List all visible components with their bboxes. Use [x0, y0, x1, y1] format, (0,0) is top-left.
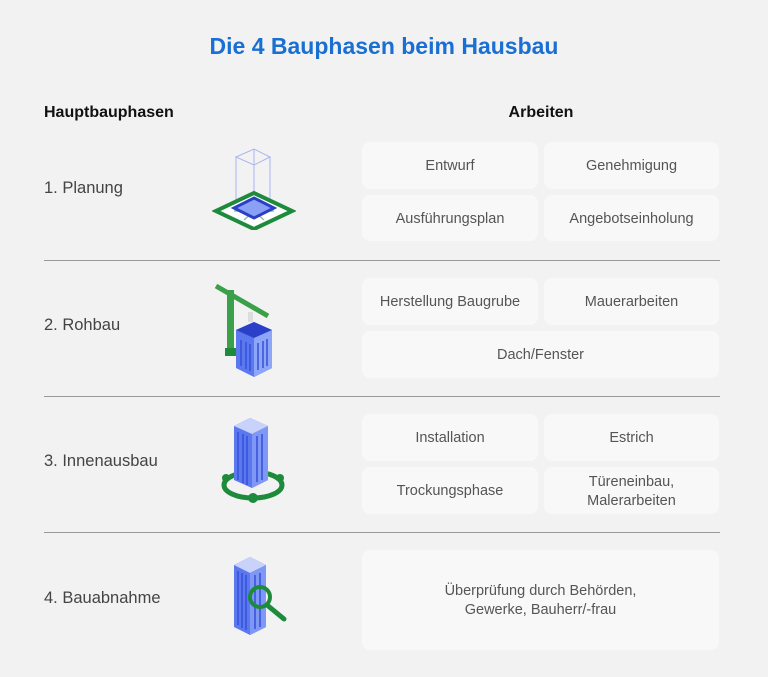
- icon: planning: [212, 148, 296, 230]
- phase 3 label: 3. Innenausbau: [44, 452, 158, 470]
- text: Trockungsphase: [397, 483, 503, 499]
- cards row 3: [362, 414, 538, 461]
- header: Hauptbauphasen: Hauptbauphasen: [44, 104, 174, 121]
- phase 2 label: 2. Rohbau: [44, 316, 120, 334]
- icon: crane building: [214, 284, 272, 377]
- text: Ausführungsplan: [396, 210, 504, 226]
- card row 4: Überprüfung durch Behörden,: [445, 583, 636, 599]
- text: Angebotseinholung: [569, 210, 694, 226]
- title: Die 4 Bauphasen beim Hausbau: [210, 33, 558, 59]
- phase 4 label: 4. Bauabnahme: [44, 589, 161, 607]
- cards row 2: Herstellung Baugrube: [380, 294, 520, 310]
- text: Mauerarbeiten: [585, 294, 678, 310]
- cards row 1: [362, 142, 538, 189]
- cards row 2: [362, 278, 538, 325]
- text: Genehmigung: [586, 158, 677, 174]
- card row 4: Gewerke, Bauherr/-frau: [465, 602, 616, 618]
- text: Dach/Fenster: [497, 347, 584, 363]
- icon: building with magnifier: [234, 557, 286, 635]
- text: Türeneinbau,: [589, 474, 674, 490]
- card row 4: [362, 550, 719, 650]
- text: Malerarbeiten: [587, 492, 676, 508]
- phase 1 label: 1. Planung: [44, 179, 123, 197]
- cards row 1: Entwurf: [425, 158, 475, 174]
- icon: building with cycle: [222, 418, 284, 503]
- text: Estrich: [609, 430, 654, 446]
- header: Arbeiten: Arbeiten: [509, 104, 573, 121]
- cards row 3: Installation: [415, 430, 485, 446]
